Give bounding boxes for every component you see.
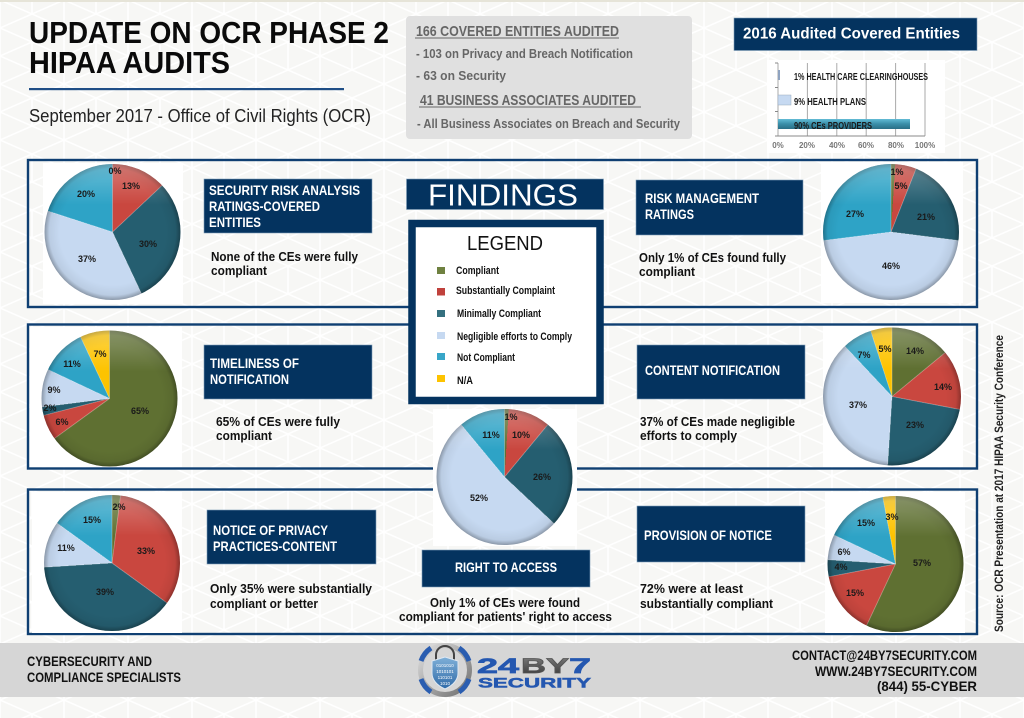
- footer tagline: CYBERSECURITY AND: [27, 653, 152, 669]
- pie chart: security risk analysis: [43, 163, 183, 304]
- legend item: negligible efforts to comply: Negligible efforts to Comply: [457, 331, 573, 343]
- pie chart: risk management: 1%: [890, 167, 904, 177]
- legend item: n/a: [437, 375, 473, 387]
- heading: content notification: [637, 345, 805, 399]
- text: risk management finding: Only 1% of CEs found fully: [639, 250, 787, 265]
- pie chart: timeliness of notification: 7%: [93, 349, 107, 359]
- pie chart: provision of notice: [825, 492, 965, 633]
- pie chart: risk management: 21%: [917, 212, 935, 222]
- legend item: substantially complaint: Substantially Complaint: [456, 285, 555, 297]
- subtitle: September 2017 - Office of Civil Rights (OCR): [29, 106, 371, 126]
- text: timeliness finding: compliant: [216, 428, 273, 443]
- logo wordmark: [477, 655, 592, 690]
- text: notice of privacy finding: Only 35% were substantially: [210, 581, 373, 596]
- pie chart: risk management: 5%: [894, 181, 908, 191]
- logo wordmark: SECURITY: [478, 674, 592, 690]
- pie chart: timeliness of notification: 6%: [55, 417, 69, 427]
- bar chart: audited covered entities: 20%: [799, 141, 815, 150]
- panel: audit counts: 166 COVERED ENTITIES AUDITED: [416, 23, 619, 40]
- pie chart: content notification: 5%: [878, 344, 892, 354]
- footer contact details: (844) 55-CYBER: [877, 678, 977, 694]
- pie chart: timeliness of notification: 2%: [43, 403, 57, 413]
- legend item: minimally compliant: [437, 308, 541, 320]
- text: notice of privacy finding: compliant or better: [210, 596, 318, 611]
- row frame: top row: [28, 160, 977, 307]
- pie chart: timeliness of notification: 9%: [47, 385, 61, 395]
- legend item: not compliant: Not Compliant: [457, 352, 515, 364]
- pie chart: security risk analysis: 37%: [78, 254, 96, 264]
- heading: 2016 audited covered entities: [734, 18, 977, 50]
- text: content notification finding: [640, 414, 795, 443]
- text: security risk finding: None of the CEs were fully: [211, 249, 359, 264]
- pie chart: security risk analysis: 30%: [139, 239, 157, 249]
- row frame: bottom row: [28, 490, 977, 634]
- bar chart: audited covered entities: 1% HEALTH CARE CLEARINGHOUSES: [794, 72, 928, 83]
- legend item: negligible efforts to comply: [437, 331, 573, 343]
- heading: timeliness of notification: NOTIFICATION: [210, 371, 289, 387]
- panel: content notification: [637, 326, 963, 467]
- footer contact details: CONTACT@24BY7SECURITY.COM: [792, 647, 977, 663]
- pie chart: notice of privacy practices: 11%: [57, 543, 75, 553]
- text: provision of notice finding: 72% were at least: [640, 581, 744, 596]
- heading: provision of notice: [637, 506, 805, 562]
- heading: right to access: [422, 550, 590, 587]
- heading: notice of privacy practices: PRACTICES-CONTENT: [213, 538, 337, 554]
- pie chart: right to access: 10%: [512, 430, 530, 440]
- panel: right to access: [399, 409, 612, 624]
- footer tagline: COMPLIANCE SPECIALISTS: [27, 669, 181, 685]
- icon: shield and lock ring: [420, 646, 470, 694]
- panel: audit counts: - All Business Associates on Breach and Security: [417, 116, 681, 131]
- bar chart: audited covered entities: 100%: [915, 141, 935, 150]
- panel: audit counts: [406, 16, 692, 139]
- pie chart: right to access: 11%: [482, 430, 500, 440]
- pie chart: timeliness of notification: 11%: [63, 359, 81, 369]
- pie chart: provision of notice: 6%: [837, 547, 851, 557]
- footer contact details: [792, 647, 977, 694]
- heading: security risk analysis: SECURITY RISK ANALYSIS: [209, 182, 360, 198]
- heading: provision of notice: PROVISION OF NOTICE: [644, 527, 772, 543]
- legend item: not compliant: [437, 352, 515, 364]
- pie chart: notice of privacy practices: 33%: [137, 546, 155, 556]
- logo wordmark: 24: [477, 655, 520, 678]
- pie chart: notice of privacy practices: [32, 492, 182, 633]
- heading: security risk analysis: [204, 179, 372, 233]
- panel: audit counts: 41 BUSINESS ASSOCIATES AUDITED: [420, 92, 636, 109]
- bar chart: audited covered entities: 80%: [888, 141, 904, 150]
- heading: content notification: CONTENT NOTIFICATION: [645, 362, 780, 378]
- pie chart: right to access: [433, 409, 577, 546]
- pie chart: notice of privacy practices: 2%: [112, 502, 126, 512]
- logo wordmark: BY: [521, 655, 569, 678]
- pie chart: risk management: 27%: [846, 209, 864, 219]
- icon: shield and lock ring: 1010101: [436, 669, 454, 674]
- pie chart: provision of notice: 15%: [846, 588, 864, 598]
- panel: timeliness of notification: [30, 327, 372, 467]
- panel: audit counts: - 63 on Security: [416, 68, 507, 83]
- text: security risk finding: compliant: [211, 263, 268, 278]
- heading: risk management: RISK MANAGEMENT: [645, 190, 759, 206]
- pie chart: content notification: 14%: [906, 346, 924, 356]
- text: content notification finding: 37% of CEs made negligible: [640, 414, 795, 429]
- text: provision of notice finding: [640, 581, 774, 611]
- text: right to access finding: compliant for patients' right to access: [399, 609, 612, 624]
- bar chart: audited covered entities: [767, 60, 945, 153]
- text: notice of privacy finding: [210, 581, 373, 611]
- icon: shield and lock ring: 1010: [440, 681, 451, 686]
- bar chart: audited covered entities: 40%: [829, 141, 845, 150]
- icon: shield and lock ring: 0101010: [436, 663, 454, 668]
- heading: right to access: RIGHT TO ACCESS: [455, 559, 557, 575]
- pie chart: provision of notice: 4%: [834, 562, 848, 572]
- panel: notice of privacy practices: [32, 492, 376, 633]
- bar chart: audited covered entities: 90% CEs PROVIDERS: [794, 121, 872, 132]
- pie chart: notice of privacy practices: 15%: [83, 515, 101, 525]
- pie chart: timeliness of notification: [30, 327, 182, 467]
- pie chart: provision of notice: 3%: [885, 512, 899, 522]
- panel: security risk analysis: [43, 163, 372, 304]
- legend: [412, 224, 600, 400]
- pie chart: content notification: 37%: [849, 400, 867, 410]
- source note: Source: OCR Presentation at 2017 HIPAA Security Conference: [992, 335, 1006, 632]
- bar chart: audited covered entities: 0%: [772, 141, 784, 150]
- legend item: compliant: [437, 265, 499, 277]
- heading: 2016 audited covered entities: 2016 Audited Covered Entities: [743, 26, 960, 42]
- pie chart: security risk analysis: 13%: [122, 181, 140, 191]
- pie chart: security risk analysis: 0%: [108, 166, 122, 176]
- heading: security risk analysis: ENTITIES: [209, 214, 261, 230]
- pie chart: risk management: 46%: [882, 261, 900, 271]
- title: UPDATE ON OCR PHASE 2: [29, 16, 389, 50]
- pie chart: content notification: 14%: [934, 382, 952, 392]
- pie chart: security risk analysis: 20%: [77, 189, 95, 199]
- text: timeliness finding: [216, 414, 341, 443]
- title: HIPAA AUDITS: [29, 46, 230, 80]
- bar chart: audited covered entities: 9% HEALTH PLANS: [794, 97, 866, 108]
- pie chart: content notification: 23%: [906, 420, 924, 430]
- pie chart: right to access: 52%: [470, 493, 488, 503]
- heading: risk management: RATINGS: [645, 206, 694, 222]
- pie chart: right to access: 26%: [533, 472, 551, 482]
- text: security risk finding: [211, 249, 359, 278]
- title rule: [29, 88, 344, 90]
- logo wordmark: 7: [569, 655, 591, 678]
- heading: timeliness of notification: [204, 345, 372, 399]
- row frame: middle row: [28, 324, 977, 468]
- heading: timeliness of notification: TIMELINESS OF: [210, 355, 299, 371]
- footer tagline: [27, 653, 181, 685]
- pie chart: risk management: [821, 162, 963, 303]
- footer band: [0, 643, 1024, 697]
- legend item: n/a: N/A: [457, 375, 473, 387]
- text: timeliness finding: 65% of CEs were fully: [216, 414, 341, 429]
- heading: findings: FINDINGS: [428, 178, 578, 212]
- title: [29, 16, 389, 80]
- logo: 24by7 security: [420, 646, 592, 694]
- text: risk management finding: [639, 250, 787, 279]
- text: right to access finding: [399, 595, 612, 624]
- legend item: minimally compliant: Minimally Compliant: [457, 308, 541, 320]
- heading: notice of privacy practices: NOTICE OF PRIVACY: [213, 522, 329, 538]
- heading: notice of privacy practices: [207, 510, 376, 564]
- icon: shield and lock ring: 110101: [438, 675, 453, 680]
- legend: LEGEND: [467, 233, 543, 255]
- text: risk management finding: compliant: [639, 264, 696, 279]
- pie chart: provision of notice: 57%: [913, 558, 931, 568]
- bar chart: audited covered entities: 60%: [858, 141, 874, 150]
- pie chart: content notification: [823, 326, 963, 467]
- pie chart: timeliness of notification: 65%: [131, 406, 149, 416]
- panel: risk management: [636, 162, 963, 303]
- pie chart: provision of notice: 15%: [857, 518, 875, 528]
- text: right to access finding: Only 1% of CEs were found: [430, 595, 580, 610]
- panel: provision of notice: [637, 492, 965, 633]
- pie chart: notice of privacy practices: 39%: [96, 587, 114, 597]
- pie chart: content notification: 7%: [857, 350, 871, 360]
- panel: audit counts: - 103 on Privacy and Breach Notification: [416, 46, 633, 61]
- legend item: compliant: Compliant: [456, 265, 499, 277]
- legend item: substantially complaint: [437, 285, 555, 297]
- heading: risk management: [636, 180, 803, 235]
- text: provision of notice finding: substantially compliant: [640, 596, 774, 611]
- heading: security risk analysis: RATINGS-COVERED: [209, 198, 320, 214]
- text: content notification finding: efforts to comply: [640, 428, 738, 443]
- footer contact details: WWW.24BY7SECURITY.COM: [815, 663, 977, 679]
- pie chart: right to access: 1%: [504, 412, 518, 422]
